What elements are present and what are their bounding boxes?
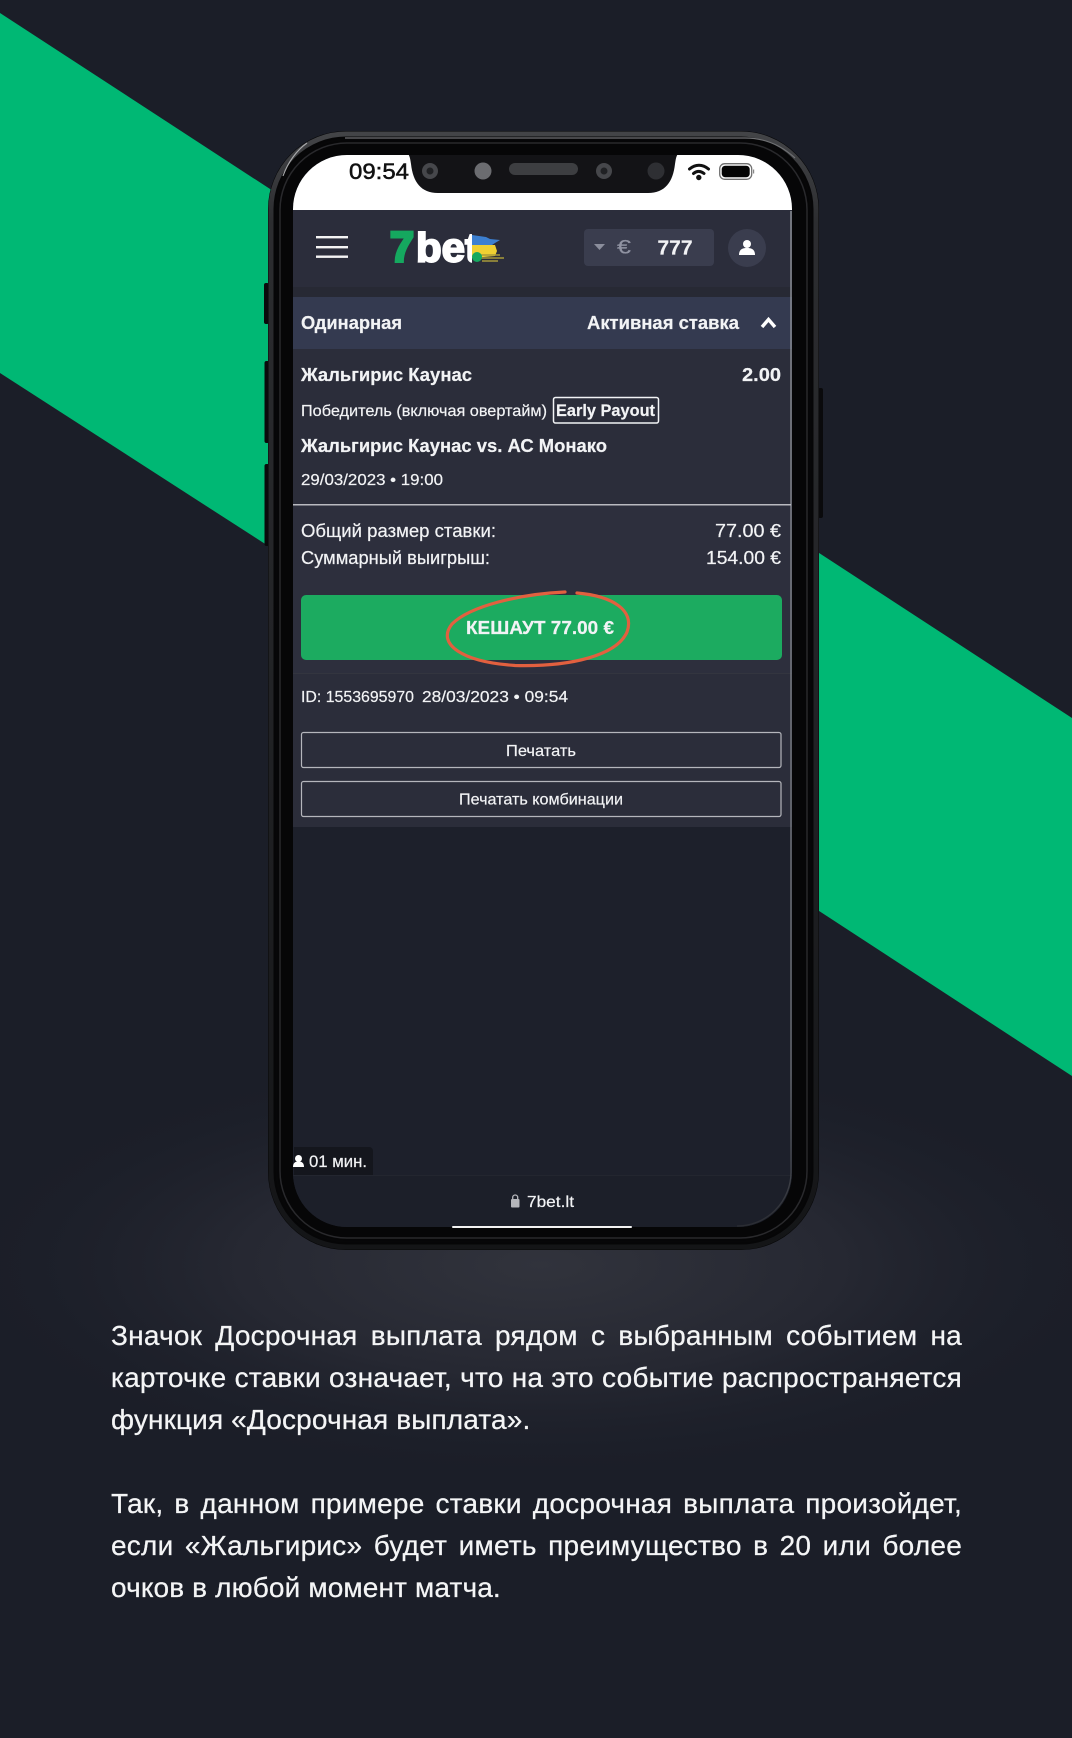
paragraph: early payout icon explanation <box>111 1320 962 1436</box>
status bar <box>293 155 792 210</box>
phone <box>264 131 823 1250</box>
cashout button <box>301 595 782 660</box>
totals <box>301 521 781 568</box>
accordion heading <box>301 313 740 333</box>
green diagonal band right <box>790 534 1072 1076</box>
bet panel background <box>293 297 792 827</box>
icon: user avatar <box>728 229 766 267</box>
print combinations button: Печатать комбинации <box>459 792 623 808</box>
divider <box>293 504 791 506</box>
paragraph: example explanation: если «Жальгирис» будет иметь преимущество в 20 или более <box>111 1530 962 1561</box>
logo: 7bet: 7 <box>390 224 414 272</box>
ticket id <box>301 689 568 706</box>
early payout badge: Early Payout <box>556 402 655 420</box>
bet selection details: Победитель (включая овертайм) <box>301 403 547 420</box>
early payout badge <box>554 398 658 423</box>
totals: 154.00 € <box>706 548 781 568</box>
bet selection details: 29/03/2023 • 19:00 <box>301 472 443 489</box>
phone screen <box>293 150 792 1227</box>
browser bottom bar fill <box>293 1176 792 1227</box>
icon: wifi <box>690 165 708 179</box>
paragraph: early payout icon explanation: Значок Досрочная выплата рядом с выбранным событием на <box>111 1320 962 1351</box>
bet selection details: Жальгирис Каунас vs. АС Монако <box>300 435 607 456</box>
notch cameras and speaker <box>422 162 664 180</box>
totals: Суммарный выигрыш: <box>301 548 490 568</box>
print combinations button <box>302 782 781 816</box>
totals: 77.00 € <box>715 521 781 541</box>
background glow under phone <box>0 1045 1072 1485</box>
accordion heading: Одинарная <box>301 313 402 333</box>
session timer: 01 мин. <box>309 1152 367 1171</box>
ticket id: ID: 1553695970 <box>301 689 414 706</box>
print button <box>302 732 781 768</box>
paragraph: early payout icon explanation: карточке ставки означает, что на это событие распространяется <box>111 1362 962 1393</box>
ticket id: 28/03/2023 • 09:54 <box>422 689 568 706</box>
notch <box>408 155 678 193</box>
screen edge highlight <box>737 211 791 1226</box>
paragraph: example explanation: Так, в данном примере ставки досрочная выплата произойдет, <box>111 1488 962 1519</box>
bet selection details: Жальгирис Каунас <box>300 364 472 385</box>
browser address bar: 7bet.lt <box>527 1194 575 1211</box>
print button: Печатать <box>506 743 576 760</box>
icon: hamburger menu <box>316 236 348 258</box>
icon: chevron up <box>762 320 775 327</box>
app header <box>293 210 792 287</box>
bet selection details: 2.00 <box>742 364 781 385</box>
side button right <box>818 388 823 518</box>
frame highlights <box>283 143 307 176</box>
side buttons left <box>264 283 270 546</box>
balance box: € <box>617 238 632 258</box>
logo: 7bet <box>390 224 506 272</box>
green diagonal band left <box>0 13 290 560</box>
accordion header <box>293 297 792 349</box>
balance box: 777 <box>658 238 692 260</box>
browser address bar <box>511 1194 575 1211</box>
paragraph: example explanation: очков в любой момент матча. <box>111 1572 501 1603</box>
status time: 09:54 <box>349 159 409 184</box>
bet selection details <box>300 364 781 489</box>
paragraph: early payout icon explanation: функция «Досрочная выплата». <box>111 1404 530 1435</box>
cashout button: КЕШАУТ 77.00 € <box>466 618 614 638</box>
red hand-drawn circle <box>447 592 629 666</box>
balance box <box>584 229 714 266</box>
session timer <box>293 1147 373 1175</box>
totals: Общий размер ставки: <box>301 521 496 541</box>
icon: battery <box>720 164 754 179</box>
logo: 7bet: bet <box>416 224 479 270</box>
paragraph: example explanation <box>111 1488 962 1603</box>
phone body <box>268 131 819 1250</box>
accordion heading: Активная ставка <box>587 313 740 333</box>
bottom toolbar line <box>293 1175 792 1176</box>
home indicator <box>452 1226 632 1228</box>
